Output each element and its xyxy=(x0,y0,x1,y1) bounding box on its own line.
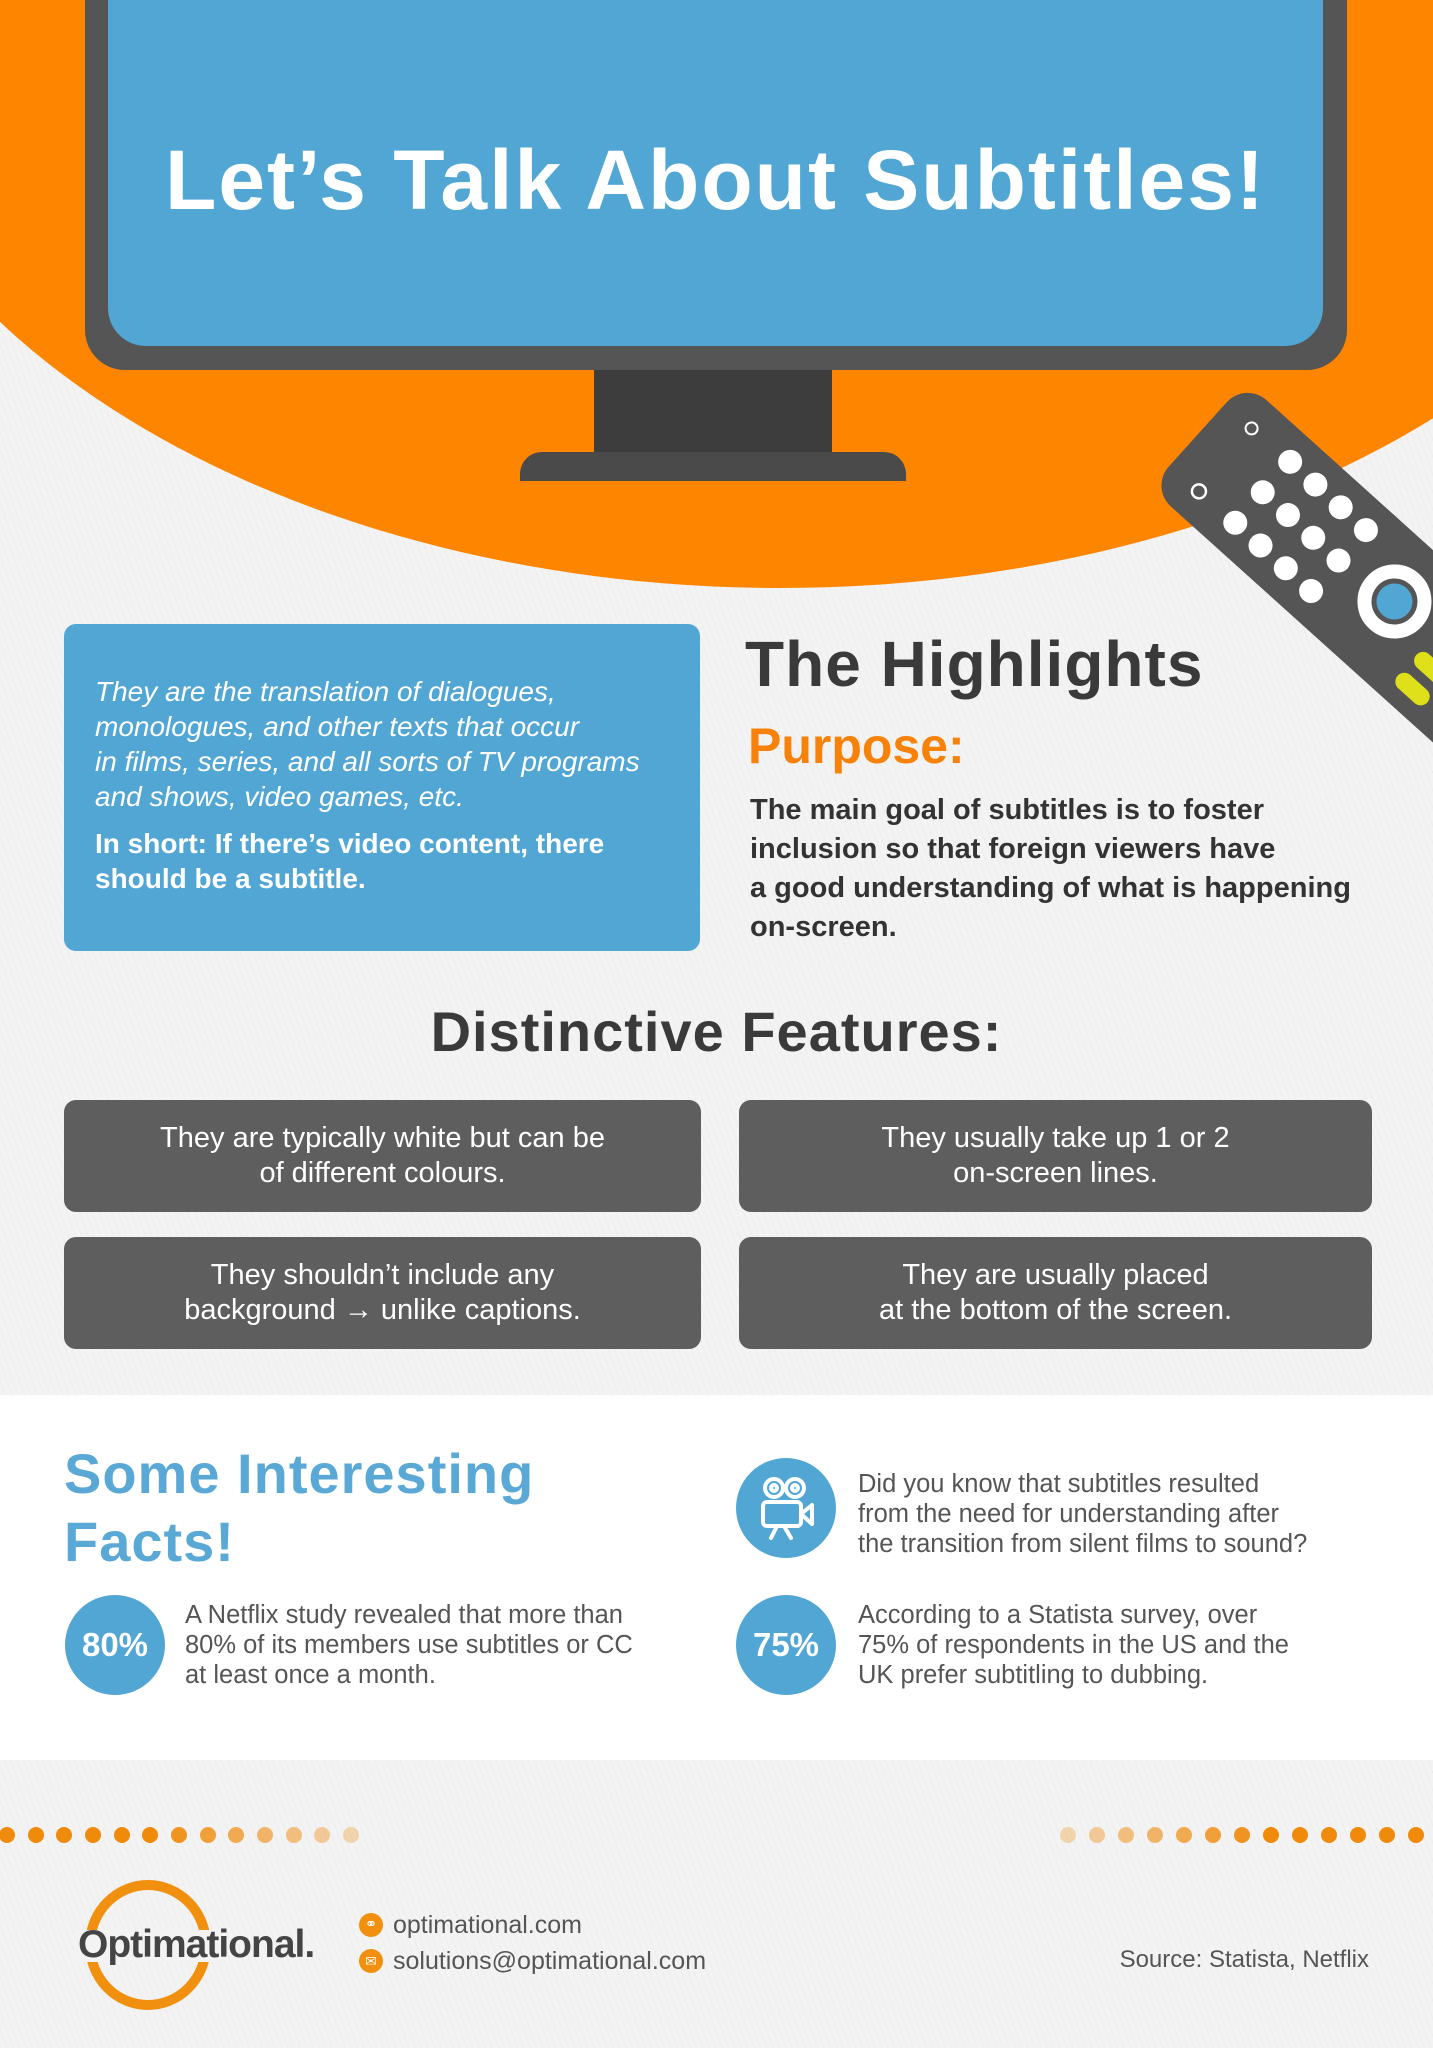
background: orange ellipse xyxy=(0,0,1433,588)
stat: 75%: 75% xyxy=(753,1626,819,1663)
heading: facts: Facts! xyxy=(64,1510,235,1573)
contact info xyxy=(359,1911,706,1975)
feature 3: They shouldn’t include any xyxy=(211,1259,554,1291)
fact text 80: 80% of its members use subtitles or CC xyxy=(185,1631,633,1659)
purpose text xyxy=(750,794,1351,943)
fact text 80: at least once a month. xyxy=(185,1661,436,1689)
fact text 80: A Netflix study revealed that more than xyxy=(185,1601,623,1629)
tv stand neck xyxy=(594,370,832,455)
icon: link: ⚭ xyxy=(365,1916,377,1933)
tv stand base xyxy=(520,452,906,481)
stat: 80%: 80% xyxy=(82,1626,148,1663)
purpose text: a good understanding of what is happening xyxy=(750,872,1351,904)
stat: 75% xyxy=(736,1595,836,1695)
contact info: optimational.com xyxy=(393,1911,582,1939)
heading: facts: Some Interesting xyxy=(64,1442,534,1505)
feature 1: of different colours. xyxy=(259,1157,506,1189)
icon: remote control xyxy=(1161,392,1433,742)
fact text camera xyxy=(858,1470,1307,1558)
purpose text: inclusion so that foreign viewers have xyxy=(750,833,1275,865)
in short text: In short: If there’s video content, there xyxy=(95,828,604,859)
purpose text: on-screen. xyxy=(750,911,897,943)
feature 4: They are usually placed xyxy=(902,1259,1209,1291)
fact text camera: Did you know that subtitles resulted xyxy=(858,1470,1259,1498)
fact text 80 xyxy=(185,1601,633,1689)
fact text camera: from the need for understanding after xyxy=(858,1500,1279,1528)
definition text: They are the translation of dialogues, xyxy=(95,676,556,707)
icon: camera xyxy=(736,1458,836,1558)
definition text: and shows, video games, etc. xyxy=(95,781,464,812)
feature 4 xyxy=(739,1237,1372,1349)
in short text xyxy=(95,828,604,894)
feature 3 xyxy=(64,1237,701,1349)
feature 2 xyxy=(739,1100,1372,1212)
fact text camera: the transition from silent films to sound? xyxy=(858,1530,1307,1558)
purpose text: The main goal of subtitles is to foster xyxy=(750,794,1264,826)
feature 3: background → unlike captions. xyxy=(184,1294,581,1326)
stat: 80% xyxy=(65,1595,165,1695)
feature 2: on-screen lines. xyxy=(953,1157,1158,1189)
feature 1: They are typically white but can be xyxy=(160,1122,605,1154)
panel: facts xyxy=(0,1395,1433,1760)
icon: link xyxy=(359,1913,383,1937)
contact info: solutions@optimational.com xyxy=(393,1947,706,1975)
title: Let’s Talk About Subtitles! xyxy=(165,133,1266,227)
feature 1 xyxy=(64,1100,701,1212)
tv xyxy=(85,0,1347,481)
icon: email: ✉ xyxy=(365,1953,377,1969)
in short text: should be a subtitle. xyxy=(95,863,366,894)
fact text 75: According to a Statista survey, over xyxy=(858,1601,1257,1629)
definition text: in films, series, and all sorts of TV programs xyxy=(95,746,640,777)
tv screen with title xyxy=(108,0,1323,346)
definition text xyxy=(95,676,640,812)
heading: purpose: Purpose: xyxy=(748,718,965,774)
logo xyxy=(78,1880,314,2010)
source: Source: Statista, Netflix xyxy=(1120,1946,1369,1973)
logo: Optimational. xyxy=(78,1923,314,1966)
heading: distinctive features: Distinctive Features: xyxy=(431,1000,1002,1063)
definition text: monologues, and other texts that occur xyxy=(95,711,579,742)
feature 2: They usually take up 1 or 2 xyxy=(881,1122,1230,1154)
heading: the highlights: The Highlights xyxy=(745,628,1203,700)
decorative dots xyxy=(0,1827,1424,1843)
icon: email xyxy=(359,1949,383,1973)
panel: definition xyxy=(64,624,700,951)
fact text 75: 75% of respondents in the US and the xyxy=(858,1631,1289,1659)
feature 4: at the bottom of the screen. xyxy=(879,1294,1232,1326)
fact text 75 xyxy=(858,1601,1289,1689)
fact text 75: UK prefer subtitling to dubbing. xyxy=(858,1661,1208,1689)
heading: facts xyxy=(64,1442,534,1573)
tv frame xyxy=(85,0,1347,370)
